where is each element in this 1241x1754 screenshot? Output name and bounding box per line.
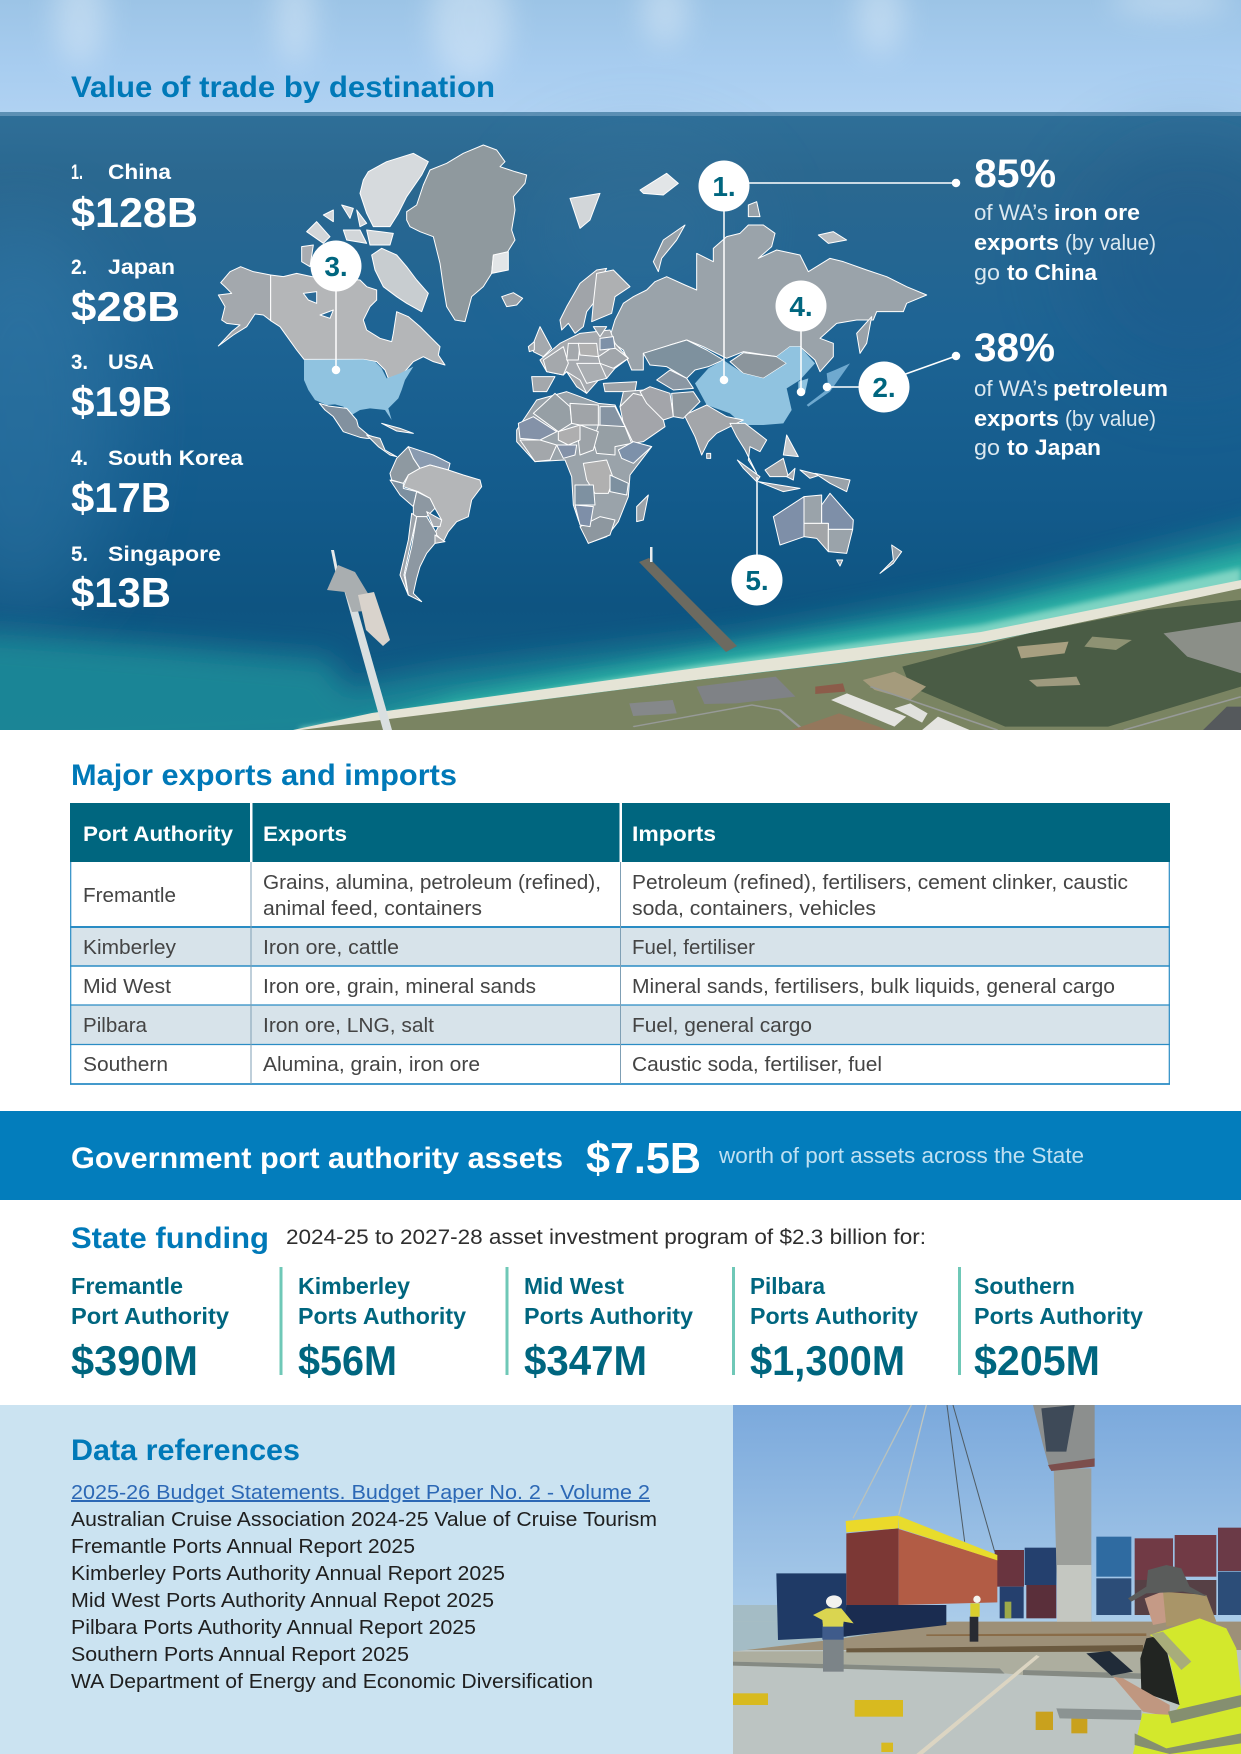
callout: iron ore exports to China [974,152,1156,285]
list: references: Southern Ports Annual Report 2025 [71,1644,409,1666]
callout: iron ore exports to China: (by value) [1065,230,1156,255]
banner: Government port authority assets: Government port authority assets [71,1142,563,1175]
China value [71,161,198,236]
world map [218,145,927,602]
row: Fremantle: animal feed, containers [263,898,482,920]
list: references: Mid West Ports Authority Annual Repot 2025 [71,1590,494,1612]
marker 2: 2. [872,372,896,403]
row: Southern [83,1054,882,1076]
marker 3 [310,240,362,292]
marker 1 [698,160,750,212]
USA value [71,351,172,425]
row: Southern: Alumina, grain, iron ore [263,1054,480,1076]
funding: Fremantle Port Authority [71,1273,229,1384]
callout: petroleum exports to Japan: go [974,435,1000,460]
South Korea value: 4. [71,447,88,470]
funding: Mid West Ports Authority: $347M [524,1337,647,1384]
funding: Pilbara Ports Authority: $1,300M [750,1337,905,1384]
list: references: Kimberley Ports Authority Annual Report 2025 [71,1563,505,1585]
marker 1: 1. [712,171,736,202]
heading: Major exports and imports: Major exports and imports [71,759,457,792]
callout: petroleum exports to Japan: petroleum [1053,376,1168,401]
list: references: Pilbara Ports Authority Annual Report 2025 [71,1617,476,1639]
marker 3: 3. [324,251,348,282]
Singapore value: Singapore [108,543,221,566]
row: Kimberley: Iron ore, cattle [263,937,399,959]
row: Fremantle [83,872,1128,920]
row: Pilbara [83,1015,812,1037]
Singapore value [71,543,221,616]
marker 4 [776,280,826,332]
land, buildings and roads [301,588,1241,730]
table header: Imports [632,823,716,846]
funding: Kimberley Ports Authority: Kimberley [298,1273,410,1299]
list: references [71,1482,657,1693]
row: Fremantle: Grains, alumina, petroleum (refined), [263,872,601,894]
callout: iron ore exports to China: of WA’s [974,200,1048,225]
funding: Pilbara Ports Authority [732,1267,918,1384]
row: Fremantle: Fremantle [83,885,176,907]
row: Fremantle: Petroleum (refined), fertilisers, cement clinker, caustic [632,872,1128,894]
heading: Value of trade by destination: Value of trade by destination [71,71,495,104]
heading: Data references: Data references [71,1434,300,1467]
callout: petroleum exports to Japan: exports [974,406,1059,431]
table header [70,803,1170,862]
funding: Southern Ports Authority: Ports Authority [974,1303,1143,1329]
marker 5: 5. [745,565,769,596]
list: value of trade by country [71,161,243,616]
banner: Government port authority assets: worth of port assets across the State [718,1143,1084,1168]
funding: Fremantle Port Authority: $390M [71,1337,198,1384]
row: Mid West: Mineral sands, fertilisers, bulk liquids, general cargo [632,976,1115,998]
row: Fremantle: soda, containers, vehicles [632,898,876,920]
row: Kimberley [83,937,755,959]
row: Kimberley: Fuel, fertiliser [632,937,755,959]
row: Mid West: Iron ore, grain, mineral sands [263,976,536,998]
list: references: Australian Cruise Association 2024-25 Value of Cruise Tourism [71,1509,657,1531]
callout: petroleum exports to Japan: (by value) [1065,406,1156,431]
Japan value: Japan [108,256,175,279]
funding: Kimberley Ports Authority: Ports Authority [298,1303,466,1329]
funding: Kimberley Ports Authority: $56M [298,1337,397,1384]
banner: Government port authority assets: $7.5B [586,1134,701,1183]
table header: Exports [263,823,347,846]
funding: Mid West Ports Authority [506,1267,693,1384]
callout: iron ore exports to China: to China [1007,260,1098,285]
row: Mid West: Mid West [83,976,171,998]
funding: Fremantle Port Authority: Fremantle [71,1273,183,1299]
row: Pilbara: Pilbara [83,1015,148,1037]
beach [293,580,1241,733]
marker 2 [858,362,910,412]
China value: 1. [71,161,83,184]
heading: State funding: State funding [71,1222,269,1255]
list: references: WA Department of Energy and Economic Diversification [71,1671,593,1693]
map: Americas and Greenland [218,145,527,602]
panel: data references [0,1405,733,1754]
callout: iron ore exports to China: exports [974,230,1059,255]
callout leader lines and map markers [332,180,960,580]
USA value: USA [108,351,154,374]
marker 4: 4. [789,291,813,322]
photo: container being lifted onto ship deck [733,1405,1241,1754]
row: Pilbara: Iron ore, LNG, salt [263,1015,434,1037]
South Korea value: South Korea [108,447,243,470]
callout: petroleum exports to Japan: of WA’s [974,376,1048,401]
China value: $128B [71,189,198,236]
callout: petroleum exports to Japan [974,326,1168,460]
funding: Southern Ports Authority: $205M [974,1337,1100,1384]
banner: Government port authority assets [0,1111,1241,1200]
funding: Mid West Ports Authority: Mid West [524,1273,624,1299]
panel: aerial coast hero image [0,0,1241,770]
funding: Kimberley Ports Authority [280,1267,466,1384]
row: Southern: Caustic soda, fertiliser, fuel [632,1054,882,1076]
row: Southern: Southern [83,1054,168,1076]
table: exports and imports by port authority [70,803,1170,1084]
map: Europe, Africa, Asia and Oceania [517,173,927,573]
funding: Mid West Ports Authority: Ports Authority [524,1303,693,1329]
USA value: 3. [71,351,88,374]
USA value: $19B [71,378,172,425]
Japan value: $28B [71,283,180,330]
callout: petroleum exports to Japan: to Japan [1007,435,1101,460]
South Korea value [71,447,243,521]
Japan value: 2. [71,256,87,279]
South Korea value: $17B [71,474,171,521]
funding: Southern Ports Authority [958,1267,1143,1384]
Singapore value: $13B [71,569,171,616]
marker 5 [732,554,782,606]
Japan value [71,256,180,330]
jetty and ship [344,590,392,730]
funding: Pilbara Ports Authority: Ports Authority [750,1303,918,1329]
row: Kimberley: Kimberley [83,937,176,959]
Singapore value: 5. [71,543,88,566]
funding: Fremantle Port Authority: Port Authority [71,1303,229,1329]
callout: petroleum exports to Japan: 38% [974,326,1055,370]
list: references: 2025-26 Budget Statements. Budget Paper No. 2 - Volume 2 [71,1482,650,1504]
callout: iron ore exports to China: 85% [974,152,1056,196]
list: references: Fremantle Ports Annual Report 2025 [71,1536,415,1558]
callout: iron ore exports to China: iron ore [1054,200,1140,225]
China value: China [108,161,171,184]
row: Mid West [83,976,1115,998]
funding: Pilbara Ports Authority: Pilbara [750,1273,825,1299]
table header: Port Authority [83,823,233,846]
text: asset investment program: 2024-25 to 2027-28 asset investment program of $2.3 billion for: [286,1226,926,1249]
row: Pilbara: Fuel, general cargo [632,1015,812,1037]
funding: Southern Ports Authority: Southern [974,1273,1075,1299]
callout: iron ore exports to China: go [974,260,1000,285]
